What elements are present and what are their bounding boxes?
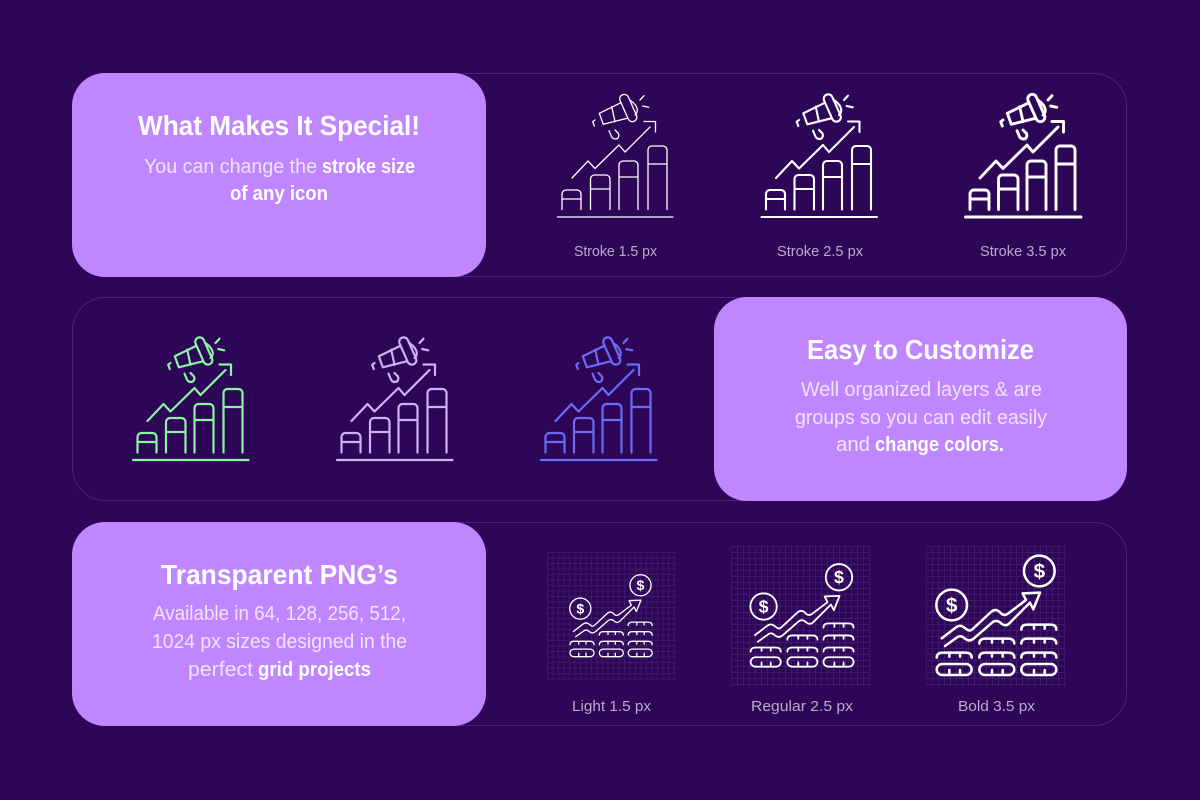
description: of any icon (230, 183, 328, 205)
panel: transparent PNGs (72, 522, 1126, 726)
card: transparent PNGs (72, 522, 486, 726)
icon: regular coin chart on grid (731, 546, 870, 686)
description: Available in 64, 128, 256, 512, (153, 603, 406, 625)
panel outline: stroke sizes (72, 74, 1126, 276)
label: stroke 1.5: Stroke 1.5 px (574, 243, 657, 260)
heading: Easy to Customize (807, 334, 1034, 365)
icon: lilac growth chart (337, 336, 452, 460)
panel: what makes it special (72, 73, 1126, 277)
description: 1024 px sizes designed in the (152, 631, 407, 653)
icon: regular coin chart on grid: $ (834, 567, 844, 587)
label: bold: Bold 3.5 px (958, 698, 1036, 715)
icon: green growth chart (133, 336, 248, 460)
label: stroke 3.5: Stroke 3.5 px (980, 243, 1066, 260)
card: easy to customize (714, 297, 1127, 501)
heading: Transparent PNG’s (161, 559, 398, 590)
description (152, 603, 407, 681)
panel: easy to customize (72, 297, 1127, 501)
description (795, 379, 1047, 456)
description: grid projects (258, 659, 371, 681)
icon: blue growth chart (541, 336, 656, 460)
icon: regular coin chart on grid: $ (759, 596, 769, 616)
icon: bold coin chart on grid (926, 546, 1066, 686)
icon: growth chart stroke 1.5 (558, 93, 673, 217)
icon: growth chart stroke 3.5 (966, 93, 1081, 217)
icon: growth chart stroke 2.5 (762, 93, 877, 217)
label: stroke 2.5: Stroke 2.5 px (777, 243, 863, 260)
description: change colors. (875, 434, 1004, 456)
label: regular: Regular 2.5 px (751, 698, 854, 715)
panel outline: colors (72, 298, 1126, 500)
description: groups so you can edit easily (795, 407, 1047, 429)
heading: What Makes It Special! (138, 110, 420, 141)
description: You can change the (144, 156, 317, 178)
description: and (836, 434, 870, 456)
icon: bold coin chart on grid: $ (946, 594, 958, 617)
icon: light coin chart on grid (547, 552, 676, 680)
icon: bold coin chart on grid: $ (1034, 560, 1046, 583)
label: light: Light 1.5 px (572, 698, 652, 715)
description: perfect (188, 659, 253, 681)
description: stroke size (322, 156, 415, 178)
description (144, 156, 415, 205)
icon: light coin chart on grid: $ (637, 578, 645, 594)
description: Well organized layers & are (801, 379, 1042, 401)
icon: light coin chart on grid: $ (576, 601, 584, 617)
card: what makes it special (72, 73, 486, 277)
panel outline: sizes (72, 522, 1126, 726)
